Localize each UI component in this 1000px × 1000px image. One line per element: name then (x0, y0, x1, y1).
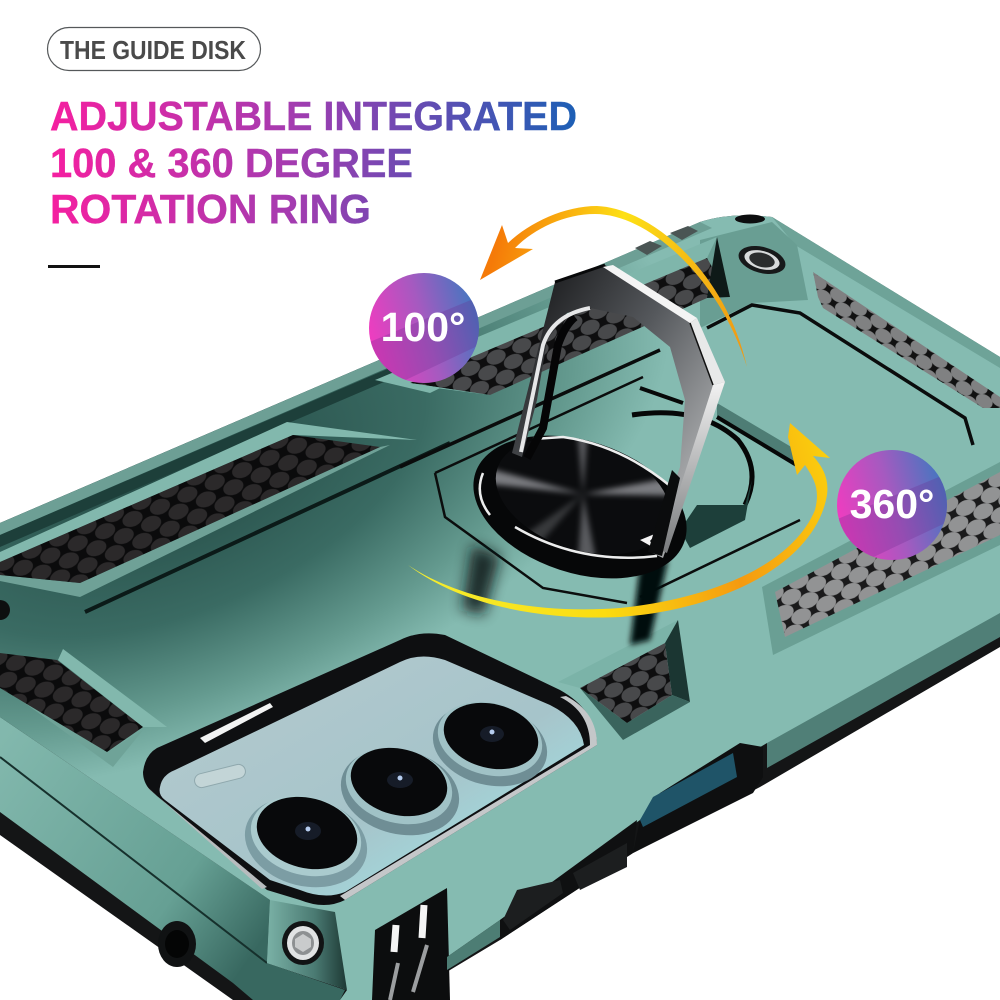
top edge hole (735, 214, 765, 224)
shadow streak right (630, 560, 668, 645)
grip: top left (0, 435, 380, 583)
oval recess (632, 413, 752, 505)
case front face (0, 215, 1000, 1000)
shadow streak left (462, 545, 500, 615)
right side band (767, 600, 1000, 768)
corner plate top right (700, 222, 808, 328)
tag: the guide disk: THE GUIDE DISK (60, 35, 246, 65)
grip: top centre (410, 258, 725, 395)
right of connector side (447, 920, 500, 970)
top centre wedge (375, 237, 717, 393)
bezel highlight (200, 703, 273, 743)
lower centre wedges (558, 620, 678, 688)
phone case (0, 214, 1000, 1000)
title: ROTATION RING (50, 186, 371, 232)
left side band (0, 717, 345, 1000)
grip: lower centre (580, 643, 672, 723)
right edge rim (772, 217, 1000, 368)
left grip bevels (0, 422, 417, 562)
case black silhouette (0, 215, 1000, 1000)
top edge buttons (635, 226, 698, 255)
ring black top edge (555, 265, 605, 282)
lens 1 (235, 784, 377, 900)
side port (633, 743, 763, 853)
disc marker (640, 533, 657, 549)
title: 100 & 360 DEGREE (50, 140, 413, 186)
top centre lower wedge (375, 380, 490, 395)
screw: bottom left (282, 921, 324, 965)
recess dark side (680, 480, 752, 548)
grip: lower left (0, 653, 143, 752)
screw plate bottom left (267, 900, 347, 990)
accent dash (48, 265, 100, 268)
top edge rim (0, 222, 712, 535)
title (50, 93, 577, 232)
ring band (512, 265, 725, 558)
badge stripes (370, 300, 479, 380)
lens 3 (424, 691, 556, 798)
side button strip (500, 820, 637, 940)
dark groove under rim (0, 345, 470, 547)
ring disc face (481, 417, 685, 575)
camera glass (160, 656, 584, 896)
headphone jack (158, 921, 196, 967)
mount top bevel (717, 403, 800, 467)
rotation arrow: 100 degree (480, 206, 747, 367)
ring inner black band (527, 317, 575, 458)
ring disc white rim (480, 437, 669, 558)
lower right grip bevel (762, 462, 1000, 655)
badge: 360 degree: 360° (850, 481, 934, 527)
groove: top right outline (400, 305, 973, 467)
tag: the guide disk (48, 28, 260, 70)
ring base disc (455, 410, 705, 604)
ring inner left highlight (521, 308, 590, 452)
badge stripes (838, 477, 947, 557)
lens 2 (332, 737, 468, 847)
mount octagon outline (435, 377, 800, 603)
side buttons (503, 843, 627, 930)
screw: top right (735, 241, 789, 279)
ring holder (473, 264, 725, 578)
mount black edge (640, 388, 800, 467)
grip: lower right (775, 472, 1000, 637)
grip end shadow (707, 237, 730, 298)
left side fold line (0, 757, 267, 963)
lower left bevel (0, 685, 143, 767)
title: ADJUSTABLE INTEGRATED (50, 93, 577, 139)
grip: top right (813, 272, 1000, 408)
ring lower right black (648, 470, 680, 556)
ring white facets (603, 265, 697, 323)
badge: 100 degree (369, 273, 479, 383)
badge: 100 degree: 100° (381, 304, 465, 350)
bottom connector (372, 888, 450, 1000)
ring mount plate (435, 377, 800, 645)
badge: 360 degree (837, 450, 947, 560)
lower left wedge (58, 649, 167, 727)
camera island (143, 633, 597, 905)
left grip lower bevel (0, 445, 390, 597)
groove: long left (85, 443, 450, 612)
screw: left edge (0, 600, 10, 620)
camera bezel (143, 633, 597, 905)
ring disc radial sheen (496, 440, 665, 554)
rotation arrow: 360 degree (408, 423, 830, 618)
flash (193, 763, 247, 789)
